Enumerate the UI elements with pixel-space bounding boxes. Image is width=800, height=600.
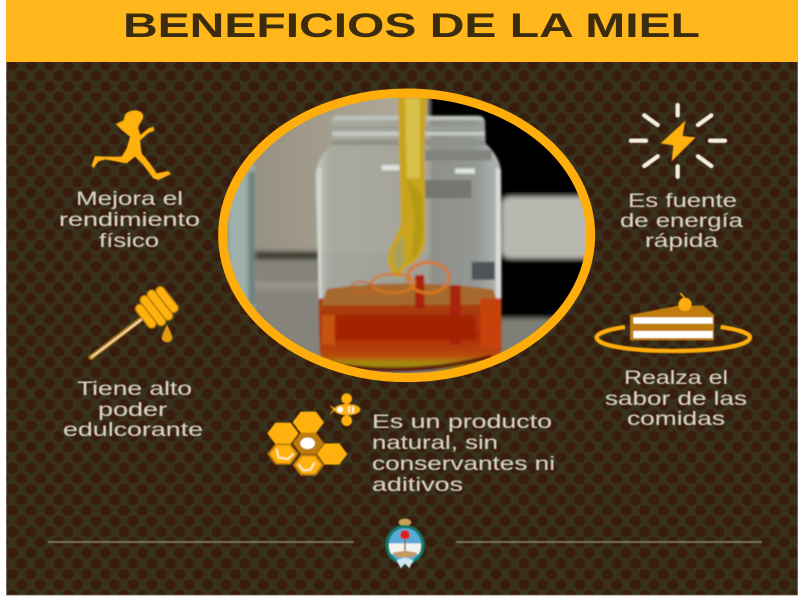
text: Es un producto natural, sin conservantes ni aditivos: conservantes ni	[372, 453, 555, 475]
text: Es un producto natural, sin conservantes ni aditivos: Es un producto	[372, 411, 552, 433]
text: Es un producto natural, sin conservantes ni aditivos	[372, 411, 555, 496]
text: Es fuente de energía rápida: rápida	[645, 230, 718, 252]
text: Realza el sabor de las comidas: comidas	[627, 408, 725, 430]
photo ring	[223, 93, 591, 378]
honey stream	[388, 97, 427, 278]
text: Es fuente de energía rápida: de energía	[620, 210, 743, 232]
title: BENEFICIOS DE LA MIEL	[123, 7, 700, 45]
text: Es un producto natural, sin conservantes ni aditivos: aditivos	[372, 474, 463, 496]
text: Mejora el rendimiento físico: rendimiento	[59, 209, 200, 231]
icon: runner	[92, 110, 171, 180]
text: Es fuente de energía rápida	[620, 190, 743, 252]
central photo: honey pouring into a glass jar	[215, 85, 602, 387]
swirl on surface	[408, 262, 449, 293]
honey in jar	[315, 298, 505, 372]
text: Tiene alto poder edulcorante: edulcorante	[63, 419, 203, 441]
icon: honeycomb	[267, 412, 347, 476]
text: Tiene alto poder edulcorante	[63, 378, 203, 441]
text: Es fuente de energía rápida: Es fuente	[628, 190, 737, 212]
text: Mejora el rendimiento físico	[59, 188, 200, 252]
text: Realza el sabor de las comidas: sabor de las	[605, 388, 747, 410]
icon: bee	[329, 393, 360, 426]
icon: Argentine coat of arms	[385, 519, 425, 568]
text: Es un producto natural, sin conservantes ni aditivos: natural, sin	[372, 432, 498, 454]
text: Mejora el rendimiento físico: Mejora el	[76, 188, 183, 210]
panel: title banner	[6, 0, 798, 62]
text: Realza el sabor de las comidas	[605, 367, 747, 430]
glass jar	[315, 115, 505, 372]
text: Realza el sabor de las comidas: Realza el	[624, 367, 728, 389]
icon: cake slice on plate	[597, 293, 750, 351]
icon: lightning bolt with rays	[631, 105, 725, 177]
text: Tiene alto poder edulcorante: poder	[98, 399, 168, 421]
icon: honey dipper	[91, 283, 182, 357]
text: Tiene alto poder edulcorante: Tiene alto	[77, 378, 192, 400]
text: Mejora el rendimiento físico: físico	[99, 230, 159, 252]
